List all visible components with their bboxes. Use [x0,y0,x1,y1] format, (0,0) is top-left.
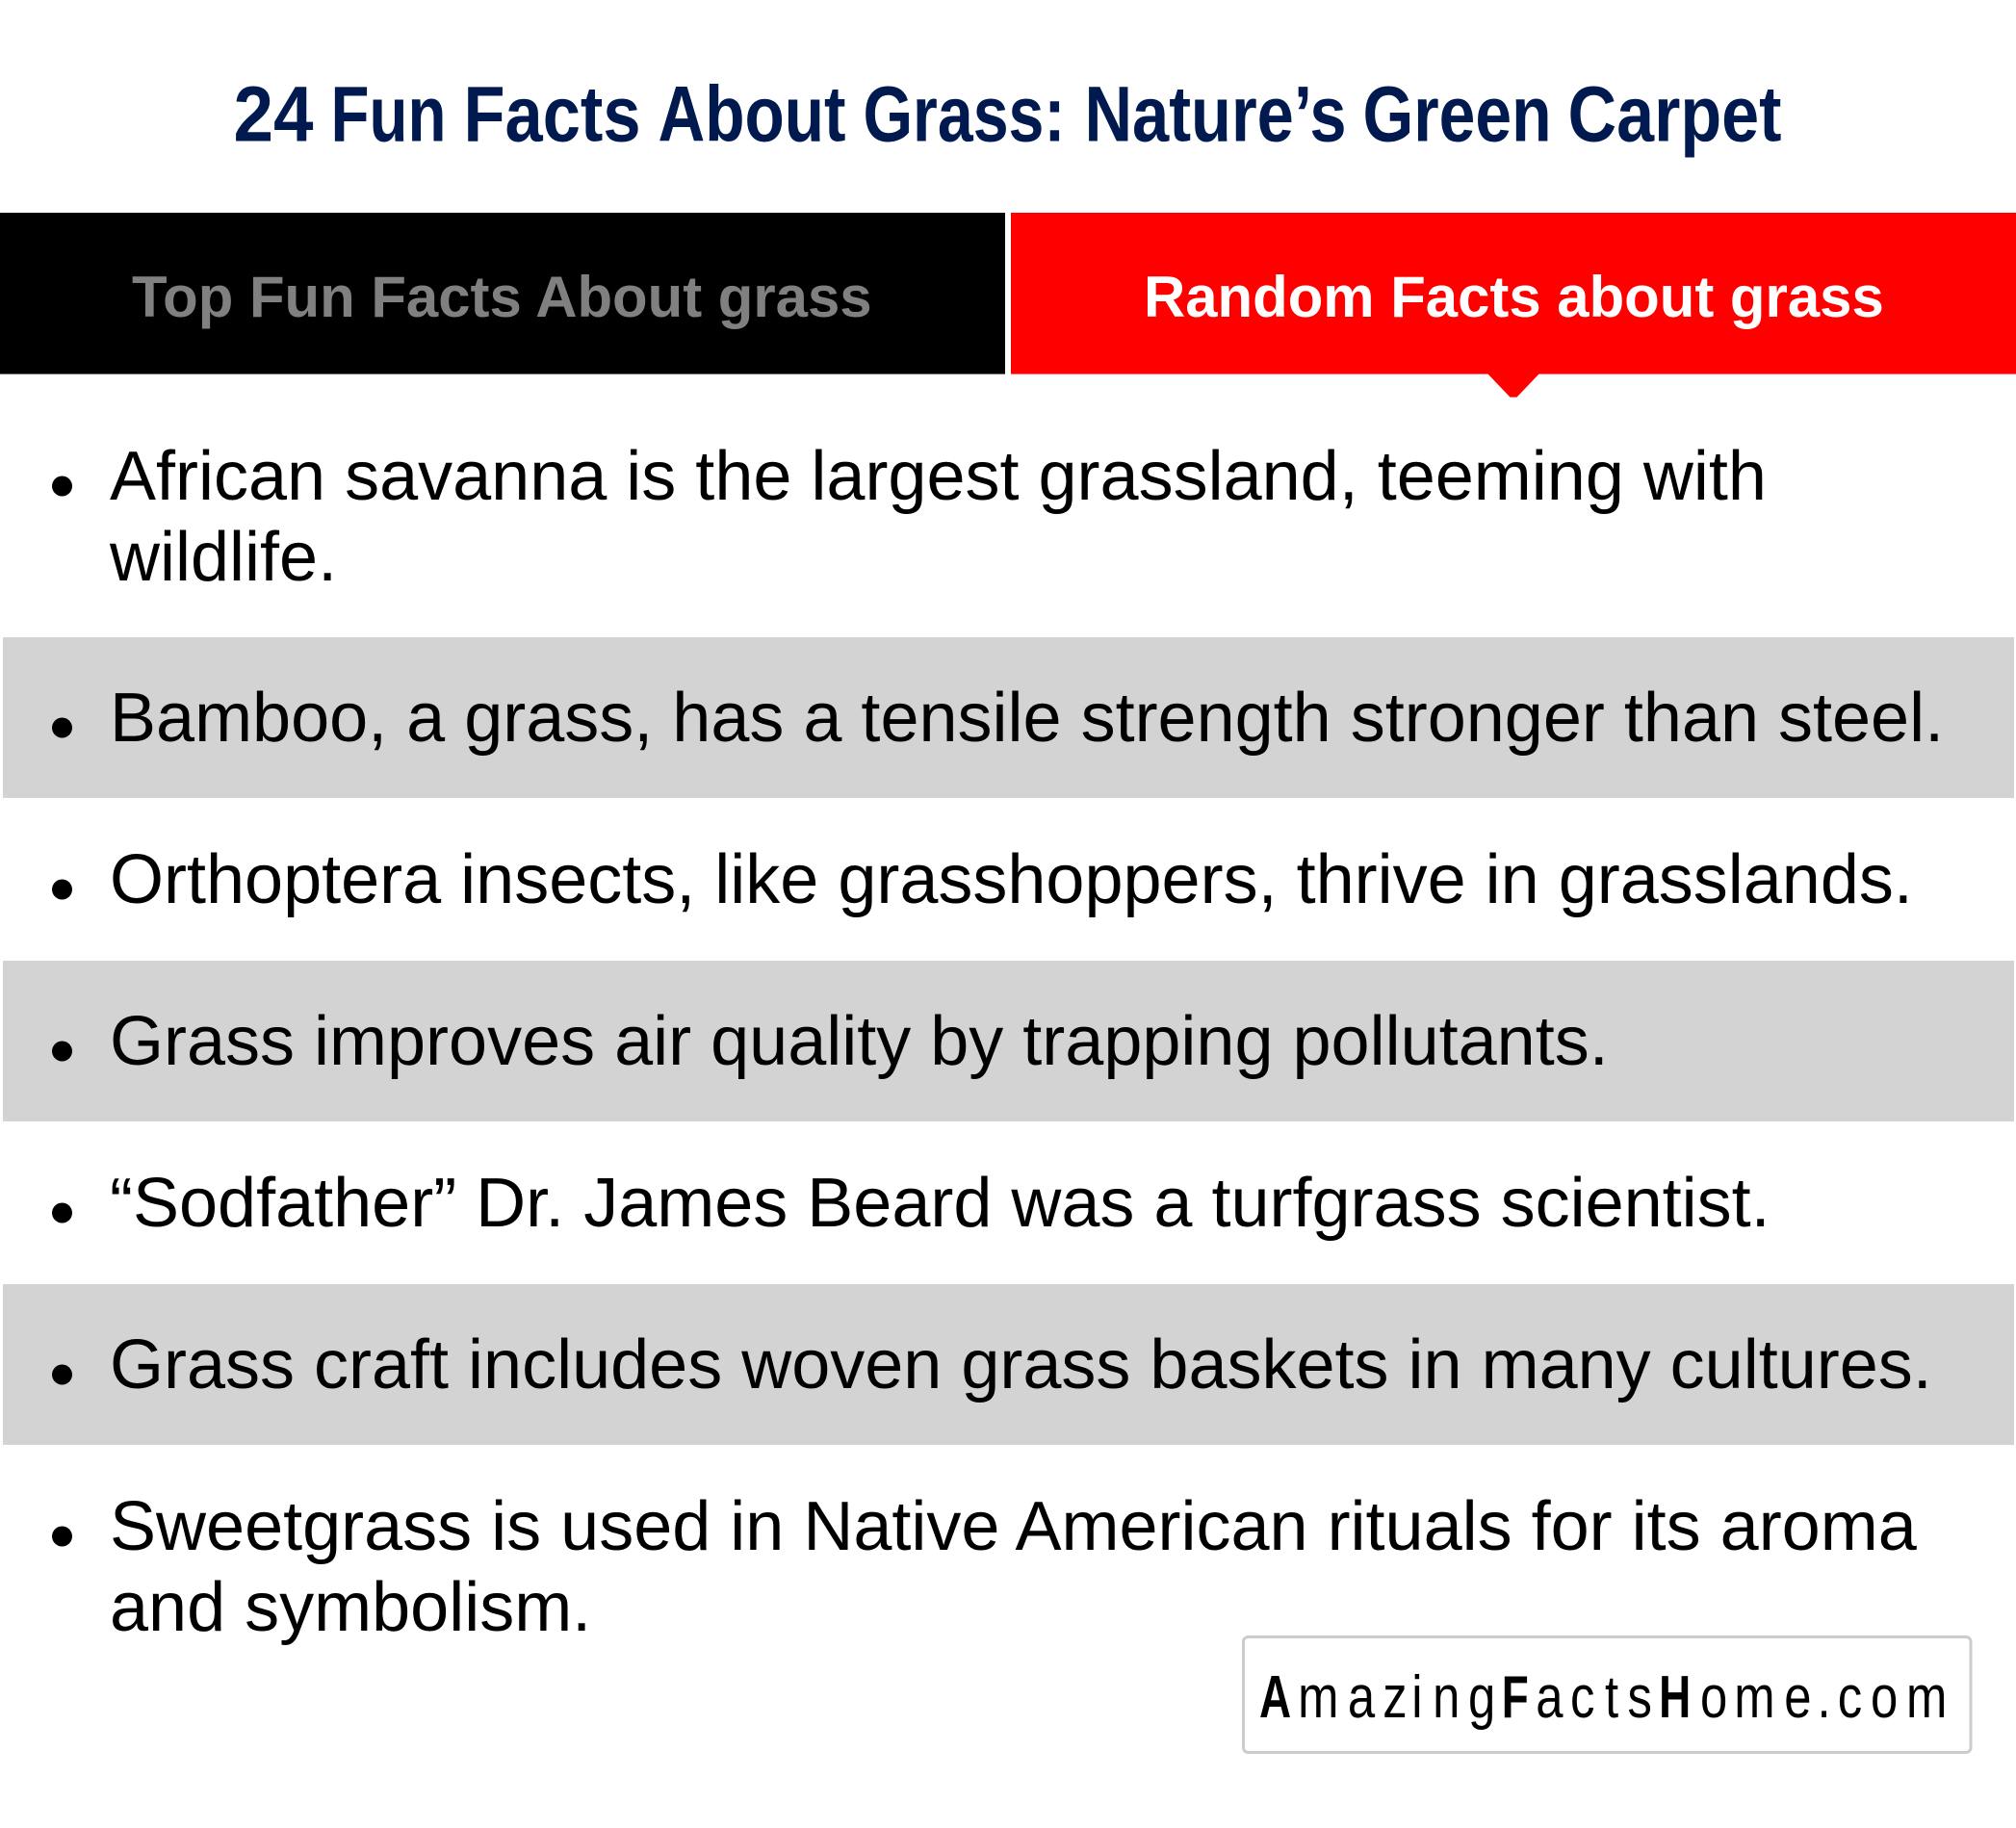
fact 1 [52,438,1767,596]
watermark: ome.com [1700,1664,1947,1731]
fact 7: and symbolism. [110,1569,591,1646]
fact 2 [3,637,2014,798]
tab: random facts (active): Random Facts about grass [1144,265,1884,329]
fact 1: African savanna is the largest grassland, teeming with [110,438,1767,515]
title: Green [1363,71,1552,159]
tab: random facts (active) [1011,213,2016,398]
title: Grass: [863,71,1065,159]
fact 3: Orthoptera insects, like grasshoppers, thrive in grasslands. [110,841,1913,918]
fact 6: Grass craft includes woven grass baskets in many cultures. [110,1326,1932,1403]
title: Facts [464,71,641,159]
title: 24 [233,71,314,159]
title: About [659,71,845,159]
fact 7: Sweetgrass is used in Native American rituals for its aroma [110,1488,1918,1565]
fact 4 [3,961,2014,1121]
fact 2: Bamboo, a grass, has a tensile strength stronger than steel. [110,680,1944,757]
fact 1: wildlife. [109,519,337,596]
title: Fun [331,71,447,159]
tab: top fun facts [0,213,1005,374]
tab: top fun facts: Top Fun Facts About grass [132,265,872,329]
fact 6 [3,1284,2014,1445]
fact 4: Grass improves air quality by trapping pollutants. [110,1003,1609,1080]
fact 7 [52,1488,1918,1646]
watermark: F [1502,1663,1529,1731]
title: Carpet [1567,71,1781,159]
watermark: H [1659,1663,1691,1731]
watermark: acts [1536,1664,1652,1731]
title: Nature’s [1084,71,1346,159]
fact 5: “Sodfather” Dr. James Beard was a turfgrass scientist. [110,1165,1770,1242]
watermark [1244,1636,1971,1752]
watermark: mazing [1298,1664,1495,1731]
title [233,71,1781,159]
watermark: A [1259,1663,1291,1731]
